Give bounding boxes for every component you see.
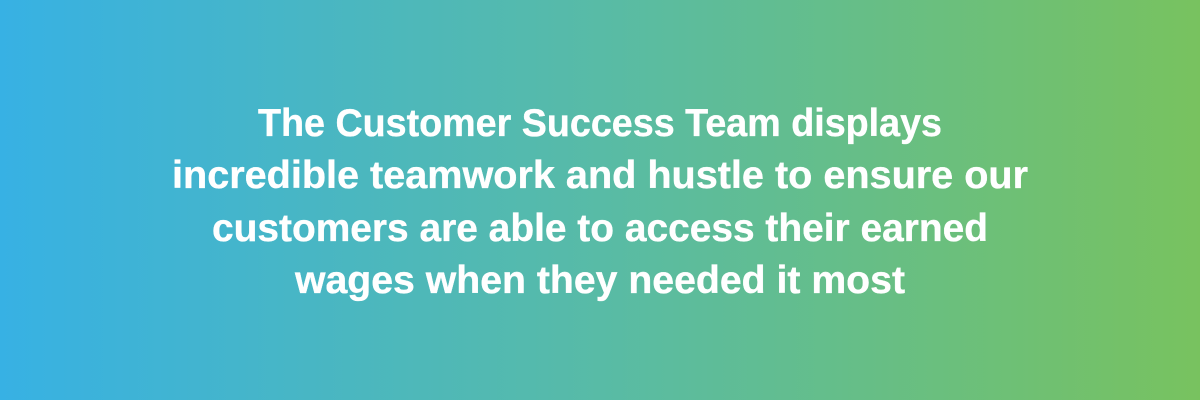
statement text block: The Customer Success Team displays	[258, 102, 942, 145]
statement text block: incredible teamwork and hustle to ensure our	[172, 154, 1028, 197]
statement text block: wages when they needed it most	[294, 259, 905, 302]
statement text block	[172, 102, 1028, 302]
statement text block: customers are able to access their earned	[212, 207, 988, 250]
